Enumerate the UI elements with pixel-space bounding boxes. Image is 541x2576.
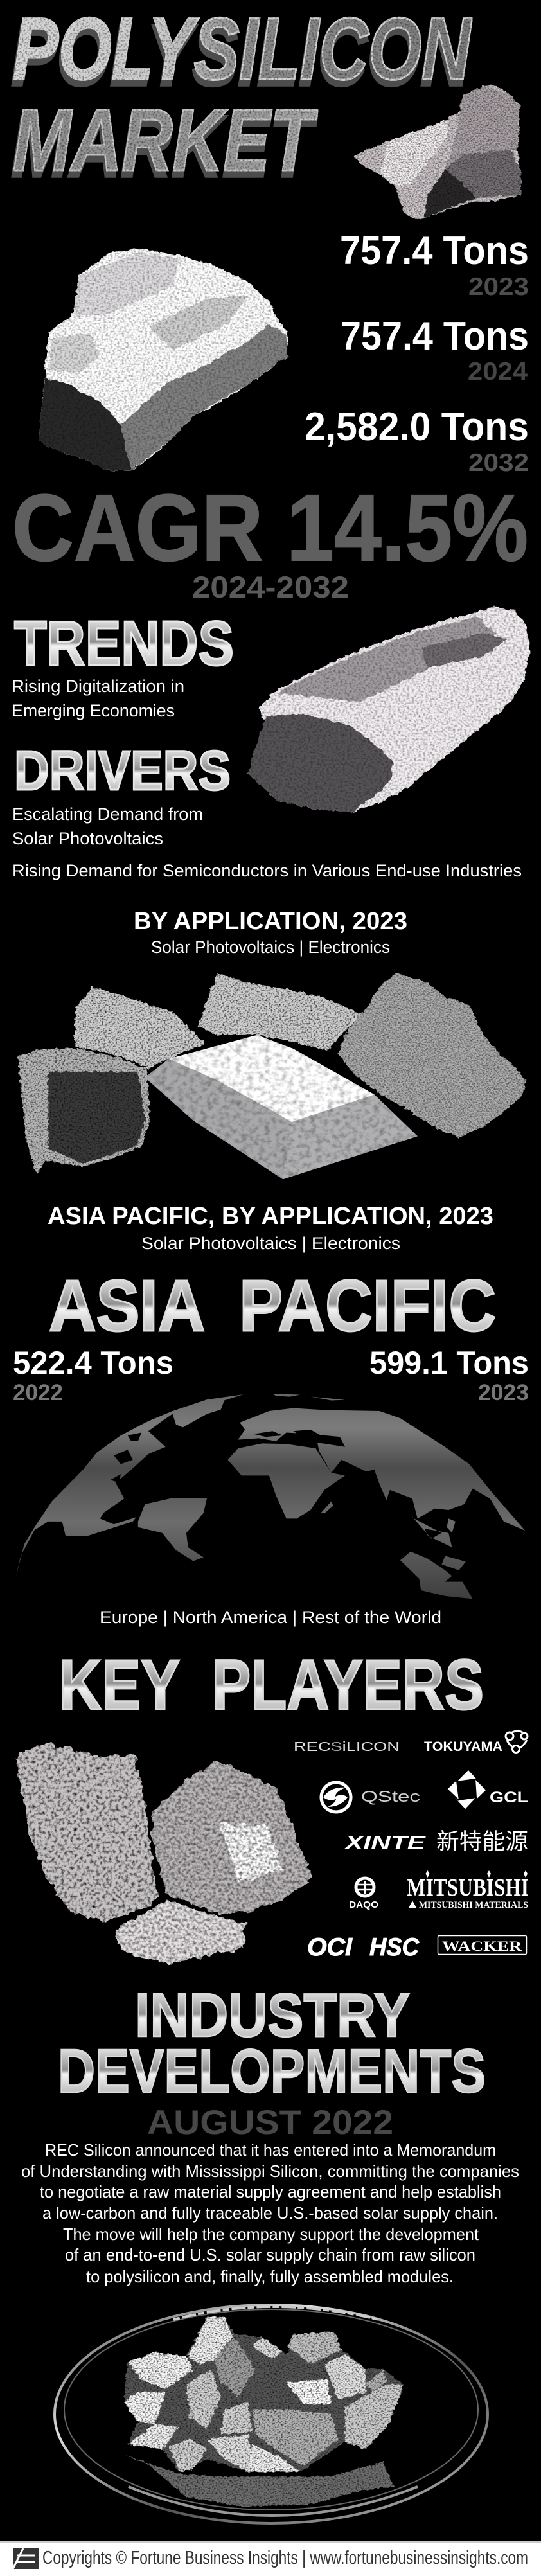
image: polysilicon chunks and ingot (18, 973, 526, 1179)
islands: southeast asia (409, 1513, 466, 1570)
rock: small front (115, 1901, 246, 1963)
title: MARKET (13, 91, 318, 190)
heading: industry developments (58, 1981, 486, 2106)
date: august 2022: AUGUST 2022 (147, 2104, 393, 2142)
logo: Mitsubishi Materials (407, 1870, 529, 1910)
stat: asia pacific 2023: 599.1 Tons (369, 1345, 529, 1381)
logo: Mitsubishi Materials: MITSUBISHI MATERIALS (419, 1900, 528, 1910)
text: drivers: Escalating Demand from (12, 804, 203, 824)
text: trends: Rising Digitalization in (12, 677, 184, 696)
rock: middle (152, 1761, 312, 1916)
CAGR figure: 2024-2032 (192, 570, 349, 604)
stat: 2032 market volume: 2,582.0 Tons (305, 405, 529, 449)
glass dish rim (55, 2305, 488, 2523)
arctic slivers (272, 1394, 345, 1400)
heading: asia pacific by application: ASIA PACIFIC, BY APPLICATION, 2023 (48, 1203, 493, 1230)
continent: eurasia (238, 1408, 525, 1531)
image: large polysilicon rock (38, 249, 288, 470)
heading: drivers: DRIVERS (14, 740, 231, 802)
rock: right (338, 973, 526, 1138)
logo: Wacker: WACKER (442, 1938, 522, 1954)
legend: application segments: Solar Photovoltaics | Electronics (151, 937, 390, 957)
continent: africa (227, 1443, 345, 1518)
stat: asia pacific 2023 (369, 1345, 529, 1405)
island: madagascar (321, 1502, 333, 1513)
stat: 2032 market volume (305, 405, 529, 477)
image: key players rocks (15, 1743, 312, 1963)
logo: GCL: GCL (490, 1789, 528, 1806)
reflection of the chunks (124, 2455, 393, 2507)
logo: Xinte: XINTE (343, 1831, 427, 1854)
heading: industry developments: INDUSTRY (135, 1981, 410, 2050)
continent: australia (400, 1552, 473, 1599)
logo: Tokuyama: TOKUYAMA (424, 1739, 502, 1754)
text: development description: The move will help the company support the development (63, 2225, 479, 2244)
logo: REC Silicon: REC SiLICON (294, 1740, 400, 1754)
text: trends (12, 677, 184, 720)
inland seas and lakes (111, 1430, 321, 1483)
stat: 2023 market volume (340, 229, 529, 301)
heading: trends: TRENDS (14, 608, 234, 679)
rock: front left (18, 1049, 150, 1175)
text: drivers: Solar Photovoltaics (12, 829, 163, 848)
image: polysilicon in glass dish (55, 2305, 488, 2523)
continent: north america (15, 1394, 244, 1579)
logo: Tokuyama (424, 1731, 528, 1754)
ingot (145, 1035, 418, 1179)
legend: regions: Europe | North America | Rest of the World (100, 1608, 441, 1627)
text: development description: to polysilicon and, finally, fully assembled modules. (86, 2267, 454, 2286)
logo: GCL (447, 1770, 528, 1809)
logo: QStec (321, 1782, 420, 1812)
logo: HSC: HSC (369, 1933, 420, 1961)
text: drivers (12, 804, 522, 880)
logo: Daqo (349, 1878, 378, 1910)
logo: Xinte (343, 1829, 528, 1854)
title (11, 0, 472, 196)
text: development description: to negotiate a raw material supply agreement and help establish (40, 2182, 501, 2201)
stat: 2023 market volume: 757.4 Tons (340, 229, 529, 273)
image: small polysilicon rock (353, 85, 521, 219)
stat: asia pacific 2022 (13, 1345, 173, 1405)
logo: QStec: QStec (361, 1788, 420, 1806)
rock: back centre (199, 973, 362, 1050)
logo: Daqo: DAQO (349, 1899, 378, 1910)
footer logo (13, 2548, 39, 2569)
stat: 2024 market volume (341, 314, 529, 386)
image: elongated rock (249, 606, 529, 813)
globe map (15, 1394, 525, 1599)
pile of chunks (124, 2317, 404, 2472)
logo: OCI: OCI (307, 1933, 353, 1961)
stat: 2023 market volume: 2023 (468, 273, 529, 301)
text: development description: a low-carbon and fully traceable U.S.-based solar supply chain. (42, 2203, 498, 2223)
heading: by application: BY APPLICATION, 2023 (134, 908, 407, 935)
stat: asia pacific 2022: 522.4 Tons (13, 1345, 173, 1381)
heading: asia pacific: ASIA PACIFIC (49, 1265, 496, 1346)
title: MARKET (11, 98, 317, 196)
rock: back left (74, 987, 206, 1069)
logo: Xinte: 新特能源 (436, 1829, 528, 1854)
legend: asia pacific segments: Solar Photovoltaics | Electronics (141, 1234, 400, 1253)
text: drivers: Rising Demand for Semiconductors in Various End-use Industries (12, 861, 522, 880)
stat: 2024 market volume: 757.4 Tons (341, 314, 529, 359)
logo: Wacker (438, 1935, 527, 1955)
footer (0, 2541, 541, 2576)
stat: asia pacific 2022: 2022 (13, 1380, 63, 1405)
text: development description: of an end-to-end U.S. solar supply chain from raw silicon (65, 2245, 475, 2264)
rock: tall left (15, 1743, 157, 1921)
text: development description: of Understanding with Mississippi Silicon, committing the companies (21, 2162, 519, 2181)
text: trends: Emerging Economies (12, 701, 175, 720)
continent: south america (138, 1498, 207, 1561)
text: development description: REC Silicon announced that it has entered into a Memorandum (45, 2140, 496, 2160)
text: development description (21, 2140, 519, 2286)
stat: asia pacific 2023: 2023 (478, 1380, 529, 1405)
stat: 2032 market volume: 2032 (468, 449, 529, 477)
stat: 2024 market volume: 2024 (468, 358, 528, 386)
